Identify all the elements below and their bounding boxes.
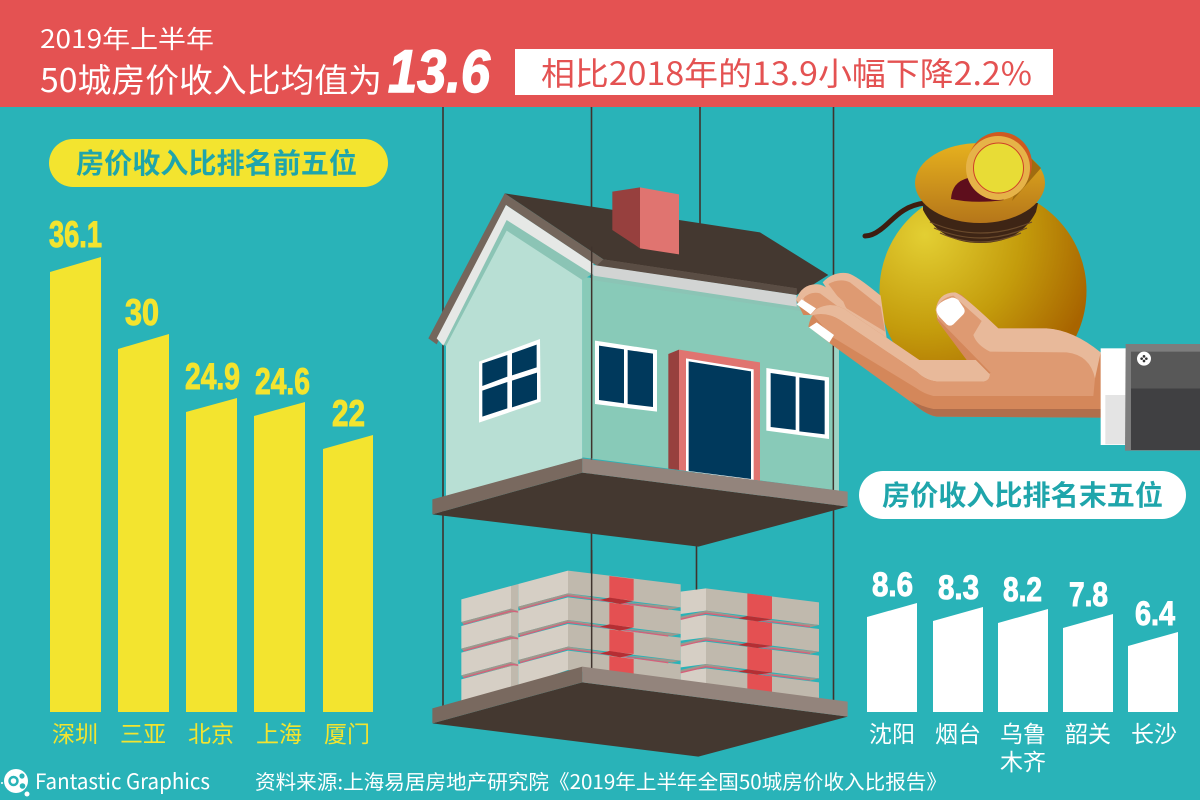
wall shadows xyxy=(440,218,817,346)
house right wall xyxy=(582,277,838,491)
hand mid tone xyxy=(813,296,1095,396)
middle finger xyxy=(796,284,848,315)
suspension cables xyxy=(443,107,834,708)
header banner xyxy=(0,0,1200,107)
bag neck xyxy=(923,203,1038,243)
bar chart: top five cities: 24.6 xyxy=(255,361,310,402)
hand lower shadow xyxy=(910,400,1102,418)
hand silhouette xyxy=(808,293,1102,418)
bar chart: bottom five cities: 8.6 xyxy=(872,566,913,604)
bar chart: top five cities: 30 xyxy=(125,292,159,333)
stack right xyxy=(681,588,819,698)
illustration: money bag xyxy=(862,132,1086,360)
roof edge brown xyxy=(428,193,797,344)
illustration: house on platform xyxy=(428,187,848,547)
source note: 资料来源:上海易居房地产研究院《2019年上半年全国50城房价收入比报告》 xyxy=(255,766,947,795)
white gable trim xyxy=(437,205,593,346)
eave trim xyxy=(593,265,797,307)
eave brown front xyxy=(597,259,797,295)
bar chart: bottom five cities: 木齐 xyxy=(1000,743,1046,777)
coin xyxy=(966,132,1032,200)
palm highlight band xyxy=(811,305,990,382)
bar chart: bottom five cities: 乌鲁 xyxy=(1000,715,1046,749)
illustration: hand holding bag xyxy=(796,273,1102,418)
bar chart: top five cities: 深圳 xyxy=(52,715,98,749)
upper platform xyxy=(432,458,848,547)
finger nails xyxy=(797,298,965,343)
lower platform xyxy=(432,667,848,757)
chimney xyxy=(612,187,679,254)
bar chart: bottom five cities: 8.2 xyxy=(1003,571,1042,609)
bag body xyxy=(880,202,1086,360)
stack left xyxy=(461,584,518,703)
cables over wall xyxy=(592,247,833,491)
side window xyxy=(479,339,541,423)
headline value 13.6: 13.6 xyxy=(388,38,491,105)
bar chart: bottom five cities: 长沙 xyxy=(1131,715,1177,749)
bar chart: top five cities: 36.1 xyxy=(49,214,102,255)
thumb and back of hand highlight xyxy=(936,292,1101,378)
heading: top five xyxy=(49,139,388,187)
bar chart: bottom five cities: 8.3 xyxy=(938,569,979,607)
front window left xyxy=(595,341,657,412)
bar chart: top five cities: 三亚 xyxy=(120,715,166,749)
cable over stacks xyxy=(589,550,594,668)
bar chart: bottom five cities: 6.4 xyxy=(1135,595,1175,633)
front window right xyxy=(766,368,829,439)
shirt cuff xyxy=(1101,348,1126,445)
bar chart: bottom five cities: 7.8 xyxy=(1069,576,1108,614)
roof xyxy=(505,193,828,295)
brand logo xyxy=(1,769,30,796)
bar chart: top five cities: 北京 xyxy=(188,715,234,749)
bar chart: top five cities: 24.9 xyxy=(185,356,240,397)
jacket sleeve xyxy=(1125,344,1200,451)
bag opening xyxy=(951,178,1004,202)
bar chart: bottom five cities: 韶关 xyxy=(1065,715,1111,749)
bar chart: top five cities: 厦门 xyxy=(324,715,370,749)
bar chart: top five cities: 22 xyxy=(332,393,365,434)
bag top xyxy=(915,143,1045,223)
house left wall xyxy=(446,225,582,497)
bar chart: bottom five cities: 沈阳 xyxy=(869,715,915,749)
door xyxy=(668,350,760,481)
heading: bottom five: 房价收入比排名末五位 xyxy=(882,474,1163,514)
brand name: Fantastic Graphics xyxy=(35,766,210,796)
bar chart: bottom five cities xyxy=(867,566,1178,777)
bar chart: bottom five cities: 烟台 xyxy=(935,715,981,749)
header title: 50城房价收入比均值为 xyxy=(40,54,382,102)
illustration: money stacks on platform xyxy=(432,550,848,757)
bag cord xyxy=(865,203,925,236)
wall corner strip xyxy=(833,313,839,491)
bar chart: top five cities: 上海 xyxy=(256,715,302,749)
thumb edge line xyxy=(937,318,990,373)
bar chart: top five cities xyxy=(49,214,373,749)
comparison callout: 相比2018年的13.9小幅下降2.2% xyxy=(541,49,1032,95)
far finger xyxy=(823,273,887,338)
heading: top five: 房价收入比排名前五位 xyxy=(76,142,357,182)
stack middle xyxy=(518,571,681,687)
header subtitle: 2019年上半年 xyxy=(40,20,214,56)
shirt cuff and jacket sleeve xyxy=(1101,344,1200,451)
